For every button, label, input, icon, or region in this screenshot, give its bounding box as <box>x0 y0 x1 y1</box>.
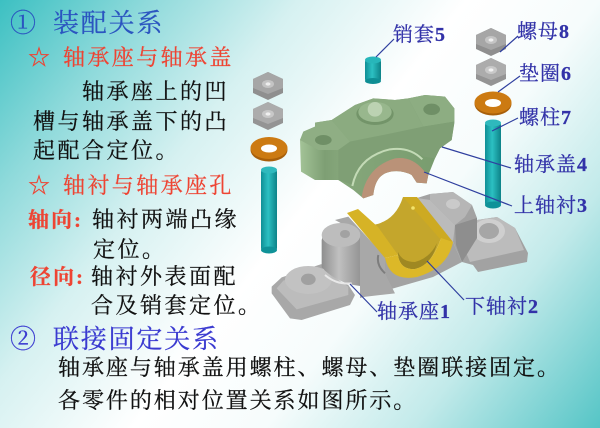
text block: axial: 轴衬两端凸缘 <box>92 207 239 232</box>
text block: axial <box>28 207 239 262</box>
right stud <box>485 120 501 208</box>
lower bearing shell <box>347 197 453 278</box>
heading 1: ① <box>10 9 38 38</box>
label: nut: 螺母8 <box>517 21 570 43</box>
text block: radial: 轴衬外表面配 <box>91 264 238 289</box>
text block: locating note: 槽与轴承盖下的凸 <box>33 109 229 134</box>
subheading: bearing seat and cap: 轴承座与轴承盖 <box>63 45 234 70</box>
text block: axial: 定位。 <box>93 237 167 262</box>
text block: connection: 轴承座与轴承盖用螺柱、螺母、垫圈联接固定。 <box>58 355 561 380</box>
left washer <box>250 137 288 162</box>
right washer <box>474 92 512 116</box>
heading 2: ② <box>10 325 38 354</box>
text block: radial <box>30 264 263 318</box>
heading 1: 装配关系 <box>53 9 164 38</box>
text block: connection: 各零件的相对位置关系如图所示。 <box>58 388 417 413</box>
leader lines <box>350 36 520 312</box>
label: lower bushing: 下轴衬2 <box>465 296 539 318</box>
text block: locating note <box>33 79 229 163</box>
label: washer: 垫圈6 <box>519 63 572 85</box>
label: bearing cap: 轴承盖4 <box>514 154 588 176</box>
text block: locating note: 轴承座上的凹 <box>82 79 229 104</box>
heading 2: 联接固定关系 <box>53 325 220 354</box>
text block: radial: 径向: <box>30 265 85 289</box>
subheading: bushing and seat hole: ☆ <box>28 173 52 198</box>
upper bearing shell <box>362 158 428 198</box>
pin sleeve <box>365 56 381 84</box>
left nut upper <box>253 72 283 100</box>
subheading: bushing and seat hole: 轴衬与轴承座孔 <box>63 173 234 198</box>
bearing base right side <box>360 192 528 298</box>
label: stud: 螺柱7 <box>519 107 572 129</box>
label: upper bushing: 上轴衬3 <box>514 195 588 217</box>
label: bearing seat: 轴承座1 <box>377 301 451 323</box>
left nut lower <box>253 102 283 130</box>
bearing cap <box>300 95 454 198</box>
text block: axial: 轴向: <box>28 208 83 232</box>
right nut lower <box>476 58 506 86</box>
text block: radial: 合及销套定位。 <box>91 293 263 318</box>
left stud <box>261 166 277 254</box>
right nut upper <box>476 28 506 56</box>
subheading: bearing seat and cap: ☆ <box>28 45 52 70</box>
text block: locating note: 起配合定位。 <box>33 138 180 163</box>
bearing base left side <box>272 217 395 320</box>
label: pin sleeve: 销套5 <box>393 24 446 46</box>
text block: connection <box>58 355 561 413</box>
